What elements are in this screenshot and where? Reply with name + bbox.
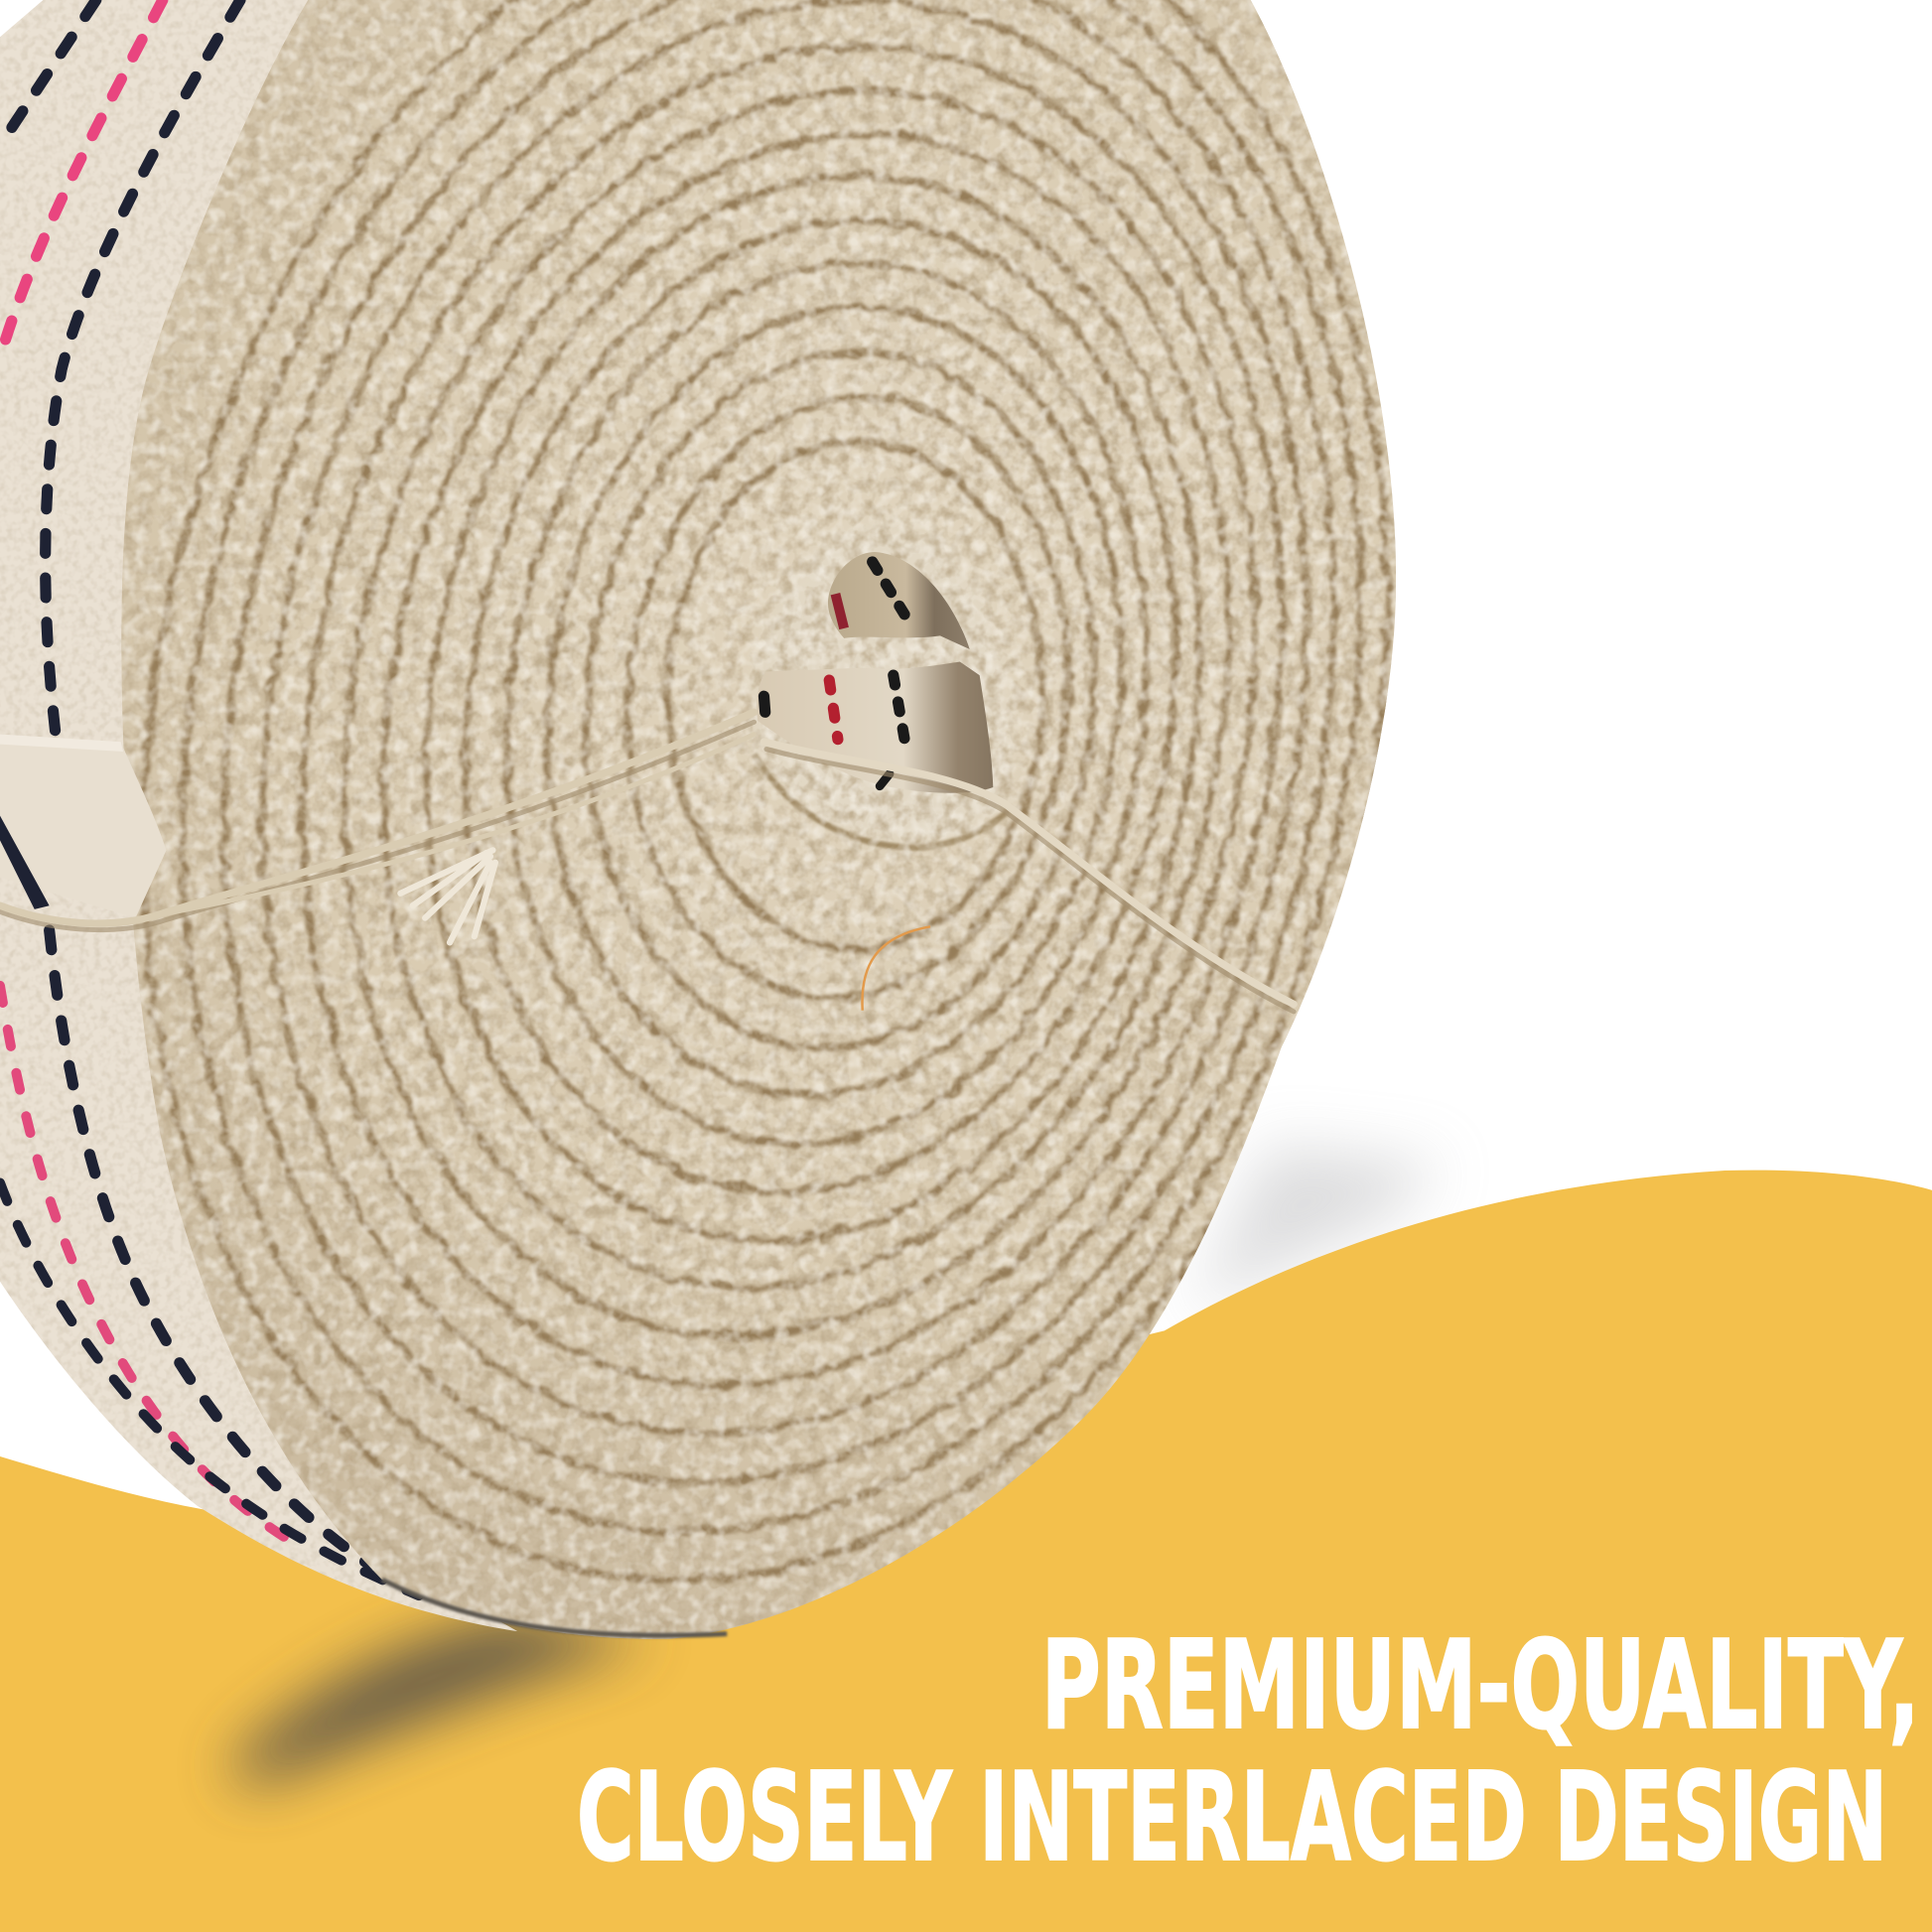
- lower black stitched stripe: [50, 930, 369, 1565]
- side band of the roll: [0, 0, 554, 1651]
- tie string: [0, 712, 1294, 1012]
- knit texture dark: [0, 0, 1478, 1663]
- string shadow: [0, 722, 1294, 1012]
- dark bottom edge of the roll: [382, 1580, 727, 1635]
- lower hole black stitches: [894, 675, 905, 746]
- upper hole opening: [828, 552, 970, 649]
- string to the right: [763, 742, 1294, 1004]
- yellow wave panel: [0, 1171, 1932, 1932]
- string to the left: [0, 712, 755, 923]
- heading: [577, 1614, 1920, 1889]
- lowest black stitched stripe: [0, 1182, 419, 1595]
- soft shadow on white background: [1182, 1146, 1442, 1330]
- band end flap at the knot: [0, 735, 167, 918]
- ground shadow on yellow: [228, 1616, 653, 1787]
- wick roll: [0, 0, 1396, 1640]
- coiled face of the roll: [121, 0, 1396, 1639]
- orange stray thread: [862, 926, 930, 1011]
- rim around the hole: [760, 580, 999, 835]
- lower pink stitched stripe: [0, 986, 290, 1540]
- concentric coil rings, dark grooves: [138, 0, 1396, 1587]
- string second strand: [123, 735, 755, 921]
- frayed string tuft: [400, 850, 495, 942]
- knit texture light: [0, 0, 1478, 1663]
- black stitched stripe one: [0, 0, 96, 145]
- lower hole red stitches: [829, 680, 838, 740]
- lower hole opening: [757, 661, 993, 793]
- pink stitched stripe: [0, 0, 163, 357]
- upper hole stitches: [873, 562, 909, 622]
- centre hole: [757, 552, 993, 793]
- black stitched stripe two: [46, 0, 240, 733]
- rim groove: [755, 755, 1013, 848]
